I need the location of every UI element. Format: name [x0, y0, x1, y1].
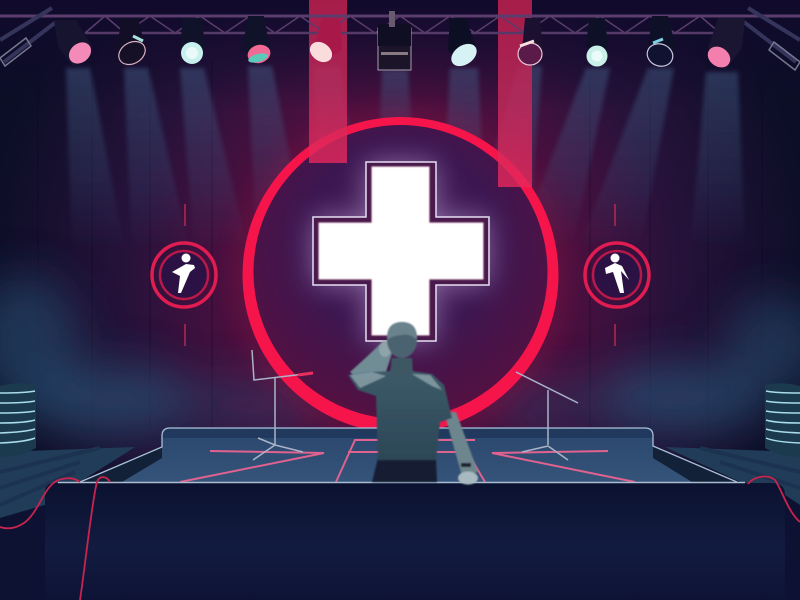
light 8 [518, 18, 543, 65]
light 11 [704, 18, 745, 72]
left microphone [252, 350, 313, 460]
light 4 [242, 16, 272, 66]
hand [379, 341, 391, 357]
left speaker drum [0, 383, 36, 457]
stage platform [80, 428, 737, 482]
person [348, 322, 478, 484]
neck [390, 358, 413, 376]
right arm [444, 412, 478, 476]
hair [387, 322, 417, 340]
outer dark floor [0, 495, 800, 600]
banner left [309, 0, 347, 163]
truss [0, 8, 800, 70]
right cable [748, 477, 800, 522]
right microphone [516, 372, 578, 460]
head [387, 322, 417, 358]
shoulder highlight [350, 372, 442, 390]
light 6 [378, 11, 411, 70]
ring interior [250, 125, 550, 425]
banner right [498, 0, 532, 187]
red ring [242, 117, 558, 433]
stage lights [54, 11, 745, 72]
side floor left [0, 447, 135, 518]
light 1 [54, 20, 95, 68]
left cables [0, 477, 110, 600]
light 7 [447, 18, 481, 71]
medical cross [313, 162, 489, 341]
right emblem [585, 204, 649, 346]
light beams [66, 66, 745, 250]
front stage block [45, 483, 785, 600]
watch [461, 463, 471, 467]
side floor right [665, 447, 800, 505]
pants [372, 458, 437, 482]
floor markings [180, 440, 635, 482]
hand on rail [458, 472, 478, 484]
right speaker drum [765, 383, 800, 457]
light 5 [306, 18, 342, 66]
raised arm [350, 344, 393, 388]
shirt [348, 371, 452, 460]
light 2 [115, 18, 149, 69]
light 10 [644, 16, 676, 70]
light 3 [180, 18, 205, 64]
light 9 [586, 18, 608, 66]
left emblem [152, 204, 216, 346]
red ring glow [248, 122, 554, 428]
smoke [0, 275, 800, 435]
stage front edge [58, 482, 745, 484]
